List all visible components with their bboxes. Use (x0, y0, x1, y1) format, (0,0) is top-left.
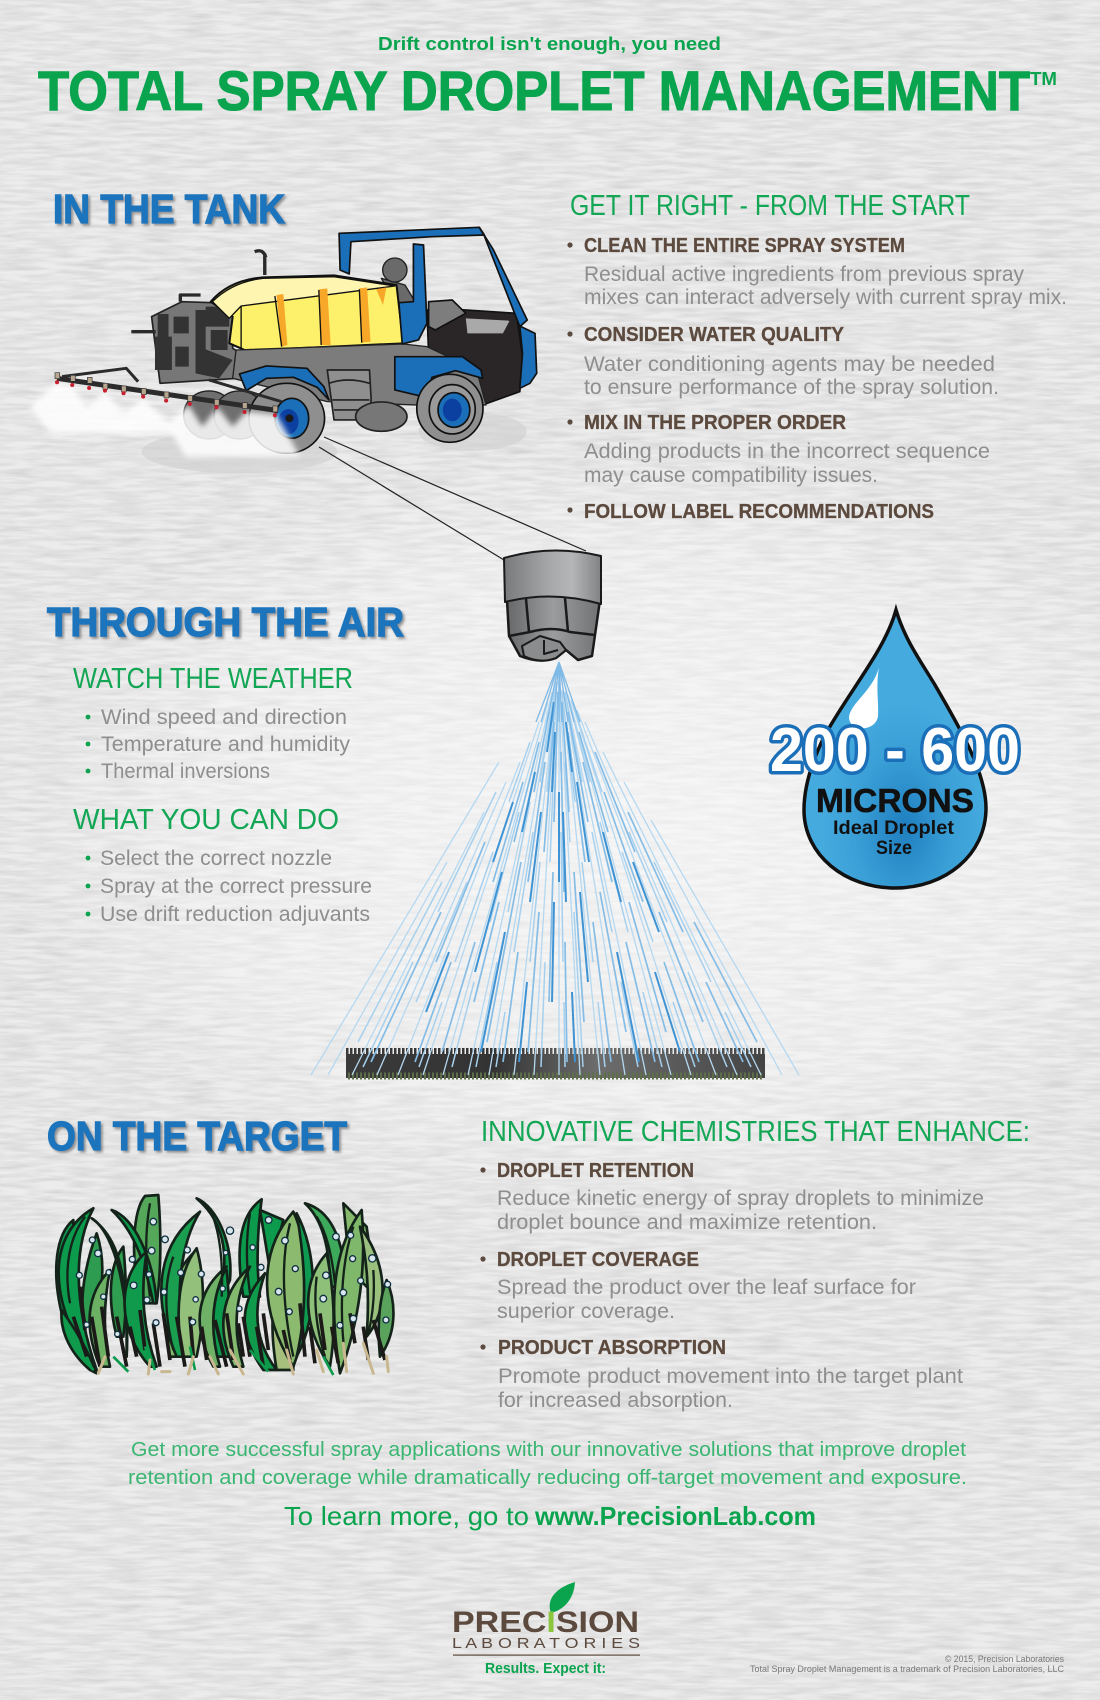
item: droplet retention: droplet bounce and maximize retention. (497, 1211, 877, 1234)
item: droplet coverage: superior coverage. (497, 1300, 675, 1323)
boom (57, 368, 282, 411)
dark spray lines (426, 702, 680, 1062)
item: product absorption: PRODUCT ABSORPTION (498, 1337, 726, 1359)
item: mix order (584, 412, 990, 487)
title block (38, 33, 1057, 122)
boom nozzles (55, 373, 278, 412)
item: product absorption: for increased absorption. (498, 1389, 733, 1412)
rear wheel (249, 383, 325, 453)
panel: innovative chemistries (480, 1116, 1030, 1412)
closing statement (128, 1439, 967, 1489)
logo: precision laboratories (452, 1582, 640, 1677)
chassis (233, 344, 486, 405)
size range: 200 - 600 (770, 716, 1020, 785)
ideal label: Ideal Droplet (833, 818, 955, 839)
ground shadow (141, 412, 527, 473)
middle leaves (59, 1208, 393, 1373)
tagline: Results. Expect it: (485, 1660, 606, 1677)
green leaf bases (78, 1347, 333, 1375)
water droplets (76, 1217, 391, 1337)
actions list: Select the correct nozzle (100, 847, 332, 870)
connector lines to nozzle (319, 437, 586, 560)
heading: innovative chemistries: INNOVATIVE CHEMISTRIES THAT ENHANCE: (481, 1116, 1030, 1148)
bullet markers (480, 1167, 486, 1350)
item: droplet retention: DROPLET RETENTION (497, 1160, 694, 1182)
mid section (327, 370, 371, 420)
logo wordmark: PREC ISION (452, 1606, 639, 1639)
main title: TOTAL SPRAY DROPLET MANAGEMENT (38, 59, 1030, 122)
leaf midribs (67, 1203, 374, 1357)
engine bay (427, 309, 523, 405)
heading: through the air: THROUGH THE AIR (47, 599, 404, 645)
logo rule (453, 1654, 640, 1656)
heading: in the tank: IN THE TANK (53, 186, 285, 232)
front wheel (417, 374, 483, 442)
item: mix order: MIX IN THE PROPER ORDER (584, 412, 847, 434)
logo leaf (550, 1582, 575, 1613)
panel: get it right (567, 190, 1067, 523)
microns label: MICRONS (816, 782, 974, 819)
copyright note (750, 1654, 1064, 1675)
operator (381, 258, 415, 303)
illustration: grass with droplets (56, 1195, 393, 1375)
weather list: Temperature and humidity (101, 733, 351, 756)
call to action (284, 1501, 816, 1531)
item: droplet retention: Reduce kinetic energy of spray droplets to minimize (497, 1187, 984, 1210)
item: label recommendations: FOLLOW LABEL RECOMMENDATIONS (584, 501, 934, 523)
front leaves (61, 1233, 277, 1373)
item: droplet retention (497, 1160, 984, 1234)
heading: what you can do: WHAT YOU CAN DO (73, 804, 339, 836)
actions list: Spray at the correct pressure (100, 875, 372, 898)
item: water quality: to ensure performance of the spray solution. (584, 376, 999, 399)
heading: get it right: GET IT RIGHT - FROM THE START (570, 190, 970, 222)
actions list: Use drift reduction adjuvants (100, 903, 370, 926)
illustration: spray cone (311, 662, 799, 1076)
item: water quality: CONSIDER WATER QUALITY (584, 324, 845, 346)
item: water quality: Water conditioning agents may be needed (584, 353, 995, 376)
subtitle: Drift control isn't enough, you need (378, 33, 721, 54)
medium spray lines (371, 692, 757, 1062)
weather list: Wind speed and direction (101, 706, 347, 729)
weather list (101, 706, 351, 783)
item: clean the system (584, 235, 1067, 309)
item: mix order: Adding products in the incorrect sequence (584, 440, 990, 463)
far rear wheels (184, 391, 265, 439)
weather list: Thermal inversions (101, 760, 270, 783)
item: clean the system: mixes can interact adversely with current spray mix. (584, 286, 1067, 309)
item: clean the system: CLEAN THE ENTIRE SPRAY SYSTEM (584, 235, 905, 257)
nozzle tips (55, 380, 277, 417)
orifice detail (544, 640, 558, 654)
closing statement: Get more successful spray applications with our innovative solutions that improve droplet (131, 1439, 966, 1461)
droplet size badge (770, 610, 1020, 888)
middle wheel (356, 402, 407, 431)
trademark: TM (1030, 69, 1057, 89)
bullet markers (86, 856, 90, 916)
copyright note: © 2015, Precision Laboratories (945, 1654, 1064, 1665)
actions list (100, 847, 372, 926)
nozzle cap (504, 550, 601, 604)
tank (211, 275, 403, 351)
logo subline: L A B O R A T O R I E S (452, 1635, 640, 1652)
call to action: www.PrecisionLab.com (534, 1501, 816, 1531)
heading: watch the weather: WATCH THE WEATHER (73, 663, 353, 695)
call to action: To learn more, go to (284, 1501, 529, 1531)
light blue extra spray lines (358, 682, 751, 1067)
crop strip under spray (346, 1058, 765, 1076)
back leaves (56, 1195, 377, 1370)
panel: watch the weather (73, 663, 353, 783)
item: mix order: may cause compatibility issues. (584, 464, 878, 487)
tan roots (98, 1343, 388, 1374)
bullet markers (86, 715, 90, 773)
tank stripes (277, 287, 386, 347)
drop highlight (849, 662, 880, 728)
dark leaf bases (73, 1287, 385, 1367)
spray mist under boom (30, 383, 300, 457)
nozzle ribs (509, 598, 595, 636)
item: clean the system: Residual active ingredients from previous spray (584, 263, 1024, 286)
nozzle orifice (522, 636, 566, 661)
item: droplet coverage: DROPLET COVERAGE (497, 1249, 699, 1271)
ideal label (833, 818, 955, 859)
faint spray lines (311, 680, 799, 1075)
item: droplet coverage: Spread the product over the leaf surface for (497, 1276, 916, 1299)
sprayer plumbing (152, 302, 246, 383)
heading: on the target: ON THE TARGET (47, 1113, 347, 1159)
bullet markers (567, 242, 573, 513)
water drop (804, 610, 986, 888)
item: water quality (584, 324, 999, 399)
illustration: spray nozzle (504, 550, 601, 661)
cab panel and pillars (239, 227, 537, 400)
illustration: sprayer truck (30, 227, 537, 473)
nozzle body (507, 595, 600, 661)
item: product absorption (498, 1337, 963, 1412)
apex spray fan (536, 662, 580, 722)
item: droplet coverage (497, 1249, 916, 1323)
item: product absorption: Promote product movement into the target plant (498, 1365, 963, 1388)
copyright note: Total Spray Droplet Management is a trademark of Precision Laboratories, LLC (750, 1664, 1064, 1675)
closing statement: retention and coverage while dramatically reducing off-target movement and exposure. (128, 1467, 967, 1489)
panel: what you can do (73, 804, 372, 926)
ideal label: Size (876, 838, 912, 859)
